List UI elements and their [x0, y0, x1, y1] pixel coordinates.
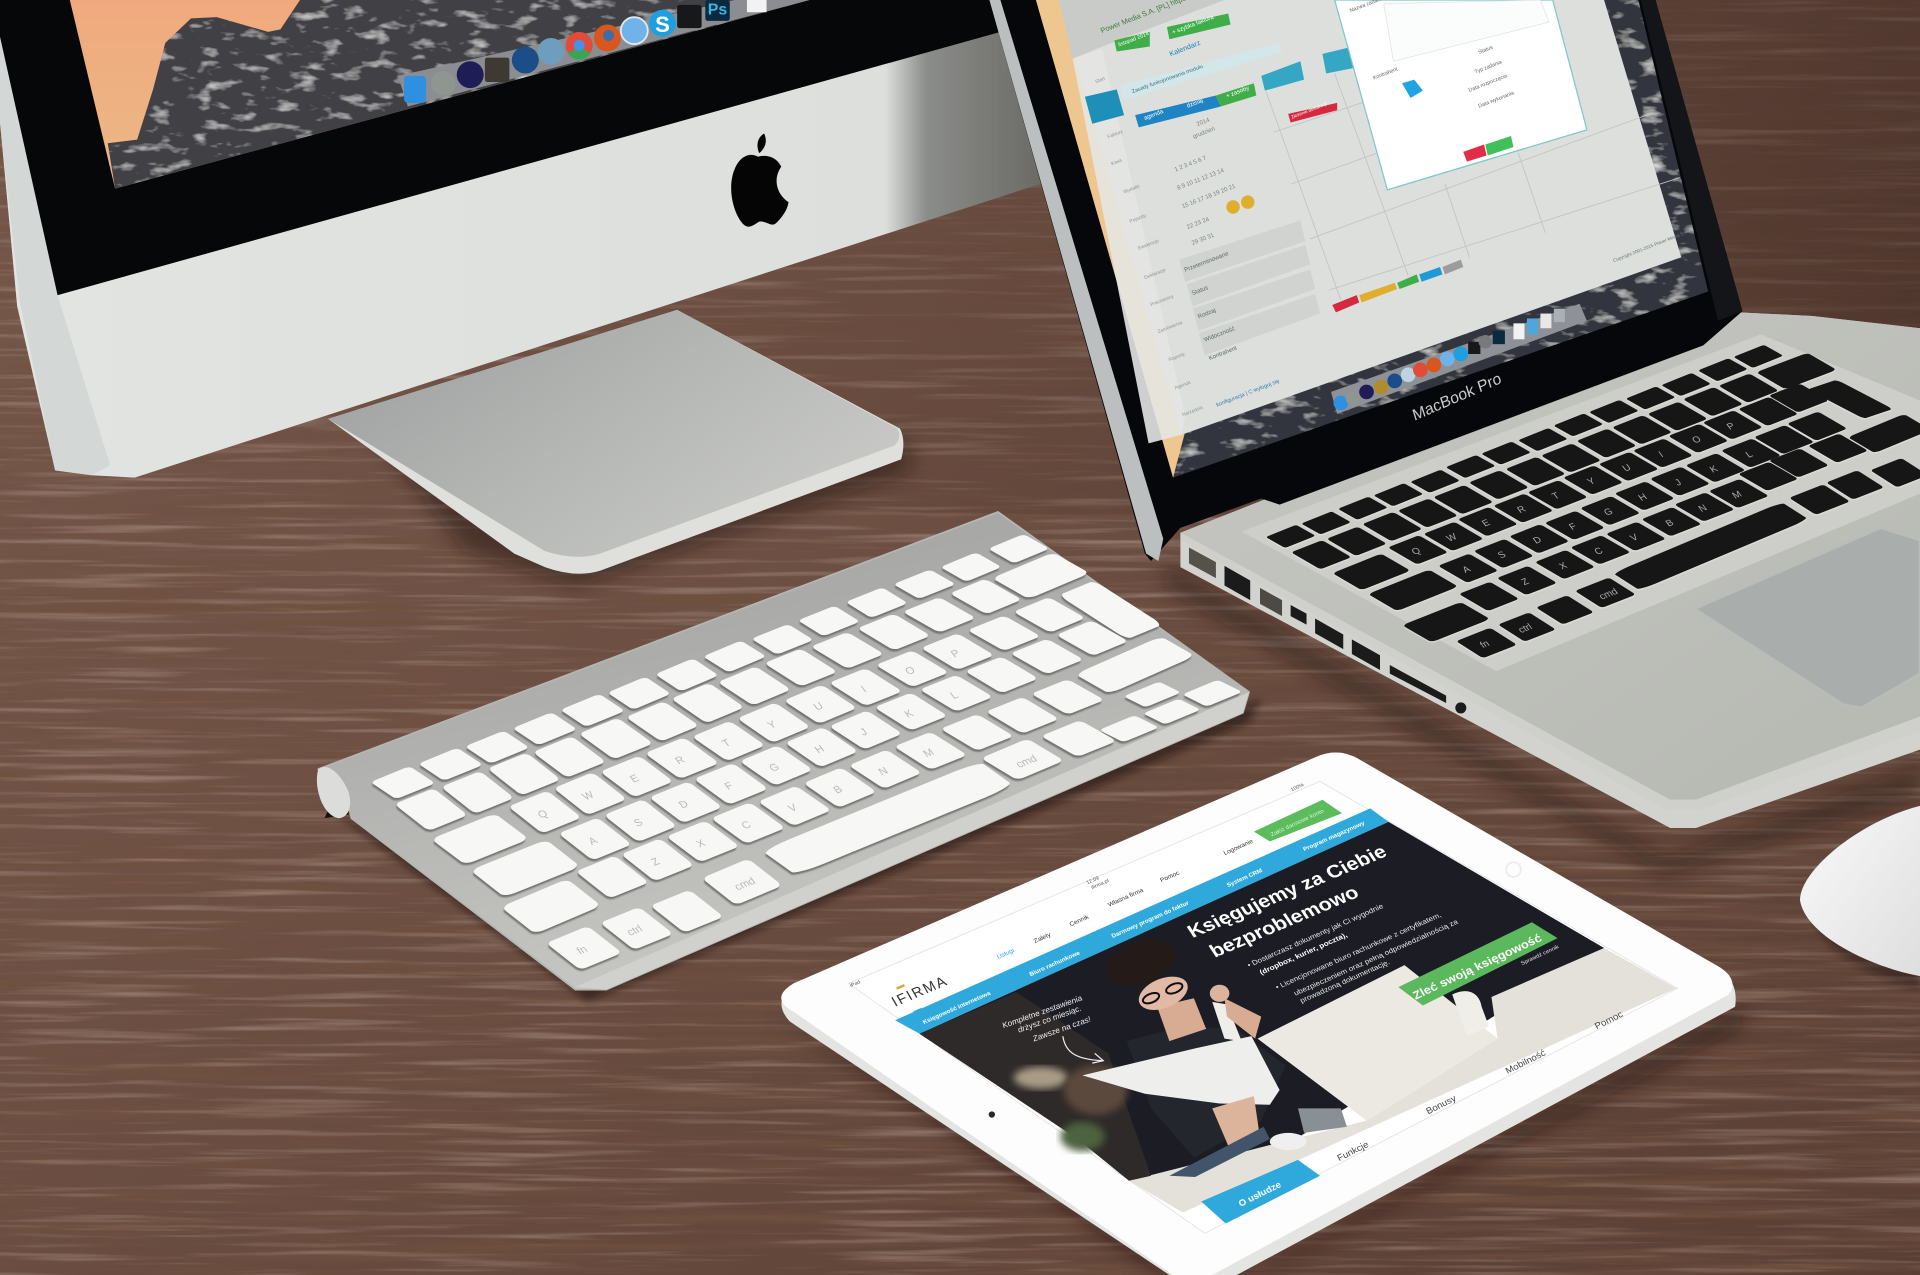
laptop trackpad [1695, 528, 1920, 708]
laptop ports [1189, 547, 1466, 713]
key letters: J [858, 727, 870, 738]
keyboard keys [370, 534, 1242, 970]
hero heading: Księgujemy za Ciebie [1184, 842, 1391, 942]
logo: iFIRMA: IFIRMA [889, 973, 951, 1010]
laptop lid bezel [989, 0, 1742, 561]
green call to action: Zleć swoją księgowość [1410, 931, 1544, 1002]
red event: Złożenie deklaracji [1290, 101, 1328, 120]
laptop key letters: E [1480, 518, 1493, 529]
key letters: O [903, 665, 918, 678]
notice strip: Zasady funkcjonowania modułu [1131, 64, 1204, 95]
key letters: G [767, 762, 782, 774]
blue nav items [922, 821, 1367, 1026]
dock icon: chrome [566, 32, 593, 60]
sidebar labels: Start [1094, 76, 1107, 85]
sidebar labels: Ewidencje [1137, 238, 1160, 252]
key letters: cmd [1014, 753, 1040, 770]
sidebar labels [1094, 76, 1204, 418]
sidebar labels: Zamówienia [1157, 320, 1184, 335]
key letters: B [831, 784, 845, 796]
laptop key letters: ctrl [1516, 622, 1535, 636]
dock icon: skype [649, 10, 676, 37]
laptop key letters: Q [1410, 546, 1424, 557]
status bar: ifirma.pl [1090, 878, 1110, 891]
calendar tab bar: dzisiaj [1186, 98, 1204, 110]
laptop key letters: D [1531, 535, 1544, 546]
iMac stand shadow and foot [328, 310, 912, 588]
laptop keys [1266, 345, 1920, 658]
laptop key letters: O [1690, 434, 1704, 446]
keyboard body [317, 512, 1249, 990]
laptop key letters: S [1496, 550, 1508, 561]
calculator and small mouse [1169, 1127, 1307, 1177]
label: MacBook Pro: MacBook Pro [1411, 370, 1504, 425]
handwritten note: Zawsze na czas! [1030, 1015, 1093, 1044]
sidebar labels: Kasa [1110, 158, 1123, 167]
laptop key letters: V [1628, 532, 1641, 544]
mini month calendar: grudzień [1192, 126, 1216, 140]
woman with paper [1082, 932, 1286, 1157]
tablet body [781, 753, 1736, 1275]
iMac black bezel [0, 0, 1000, 295]
key letters: R [673, 754, 688, 767]
key letters [536, 648, 1040, 957]
dock icon: eclipse [457, 61, 484, 88]
dock icon: finder [404, 76, 426, 103]
MacBook Pro [989, 0, 1920, 876]
red event [1288, 101, 1337, 122]
highlighted days [1226, 195, 1254, 214]
key letters: F [723, 780, 736, 792]
calendar tab bar: + zasoby [1225, 85, 1250, 100]
dock icon: launchpad [431, 71, 456, 96]
keyboard shadow [321, 698, 1261, 1002]
filter accordion: Status [1191, 285, 1209, 297]
tablet screen [849, 781, 1678, 1233]
iPad tablet [771, 753, 1745, 1275]
wireless keyboard [317, 512, 1261, 1002]
laptop key letters: R [1515, 504, 1528, 516]
laptop key letters: I [1657, 450, 1666, 460]
mini month calendar: 29 30 31 [1191, 233, 1216, 247]
laptop key letters: K [1708, 464, 1721, 475]
breadcrumb: Kalendarz: Kalendarz [1168, 38, 1202, 58]
main menu: Cennik [1068, 914, 1091, 928]
laptop key letters: P [1725, 421, 1737, 432]
status bar: 12:09 [1085, 875, 1101, 886]
task dialog: Data wykonania [1478, 90, 1515, 110]
handwritten note: drżysz co miesiąc. [1016, 1004, 1083, 1034]
dock icon: photoshop [705, 0, 730, 21]
hero bullet points: ubezpieczeniem oraz pełną odpowiedzialnością za [1292, 917, 1460, 997]
key letters: Y [765, 719, 779, 731]
key letters: S [632, 817, 646, 829]
blue nav items: Biuro rachunkowe [1029, 950, 1082, 978]
sidebar labels: Agenda [1174, 380, 1192, 391]
toolbar button: add: + szybka faktura [1171, 14, 1215, 36]
key letters: W [580, 789, 597, 803]
dock icon: safari [621, 17, 648, 44]
dock icon: firefox [594, 24, 621, 51]
key letters: T [720, 737, 734, 750]
laptop key letters: G [1602, 507, 1615, 518]
laptop shadow [1163, 563, 1920, 876]
hero desk [1129, 948, 1676, 1213]
sidebar labels: Pracownicy [1149, 293, 1175, 308]
laptop screen [1036, 0, 1708, 478]
key letters: I [859, 684, 869, 695]
dock icon: sublime [485, 58, 509, 82]
key letters: P [949, 648, 963, 660]
magic mouse [1800, 806, 1920, 990]
tablet front camera [989, 1111, 995, 1118]
mini month calendar: 8 9 10 11 12 13 14 [1176, 168, 1226, 192]
filter accordion: Przeterminowane [1184, 251, 1230, 274]
laptop key letters: fn [1478, 639, 1492, 651]
mini month calendar: 2014 [1196, 117, 1211, 128]
tablet shadow [771, 1004, 1745, 1275]
laptop key letters: X [1557, 560, 1570, 572]
mini month calendar [1174, 117, 1237, 247]
icon: apple logo [731, 134, 789, 227]
sidebar labels: Raporty [1168, 351, 1187, 363]
laptop key letters: cmd [1597, 587, 1620, 602]
dock icon: skype: S [655, 12, 670, 37]
calendar tab bar [1135, 83, 1256, 127]
hero heading: bezproblemowo [1206, 883, 1363, 962]
laptop key letters: L [1744, 449, 1756, 460]
top green button [1254, 800, 1342, 841]
hero dark panel [920, 822, 1604, 1209]
notice strip [1120, 43, 1282, 100]
mini month calendar: 1 2 3 4 5 6 7 [1174, 155, 1208, 173]
bottom tabs: O usłudze [1237, 1180, 1283, 1209]
task dialog: Typ zadania [1474, 59, 1503, 75]
screen wallpaper [1036, 0, 1708, 478]
laptop key letters: B [1664, 518, 1676, 529]
laptop key block [1266, 345, 1920, 658]
hero bullet points: • Licencjonowane biuro rachunkowe z certyfikatem, [1274, 911, 1443, 991]
main menu: Logowanie [1222, 838, 1255, 857]
key letters: ctrl [625, 923, 645, 938]
key letters: Z [649, 856, 663, 868]
key letters: E [628, 773, 642, 785]
sidebar labels: Wydatki [1122, 184, 1141, 195]
key letters: U [811, 700, 826, 713]
dock icon: terminal [677, 5, 702, 28]
laptop key letters: J [1673, 478, 1684, 488]
calendar tab bar: agenda [1143, 109, 1165, 122]
calendar grid lines [1266, 73, 1680, 300]
hero bullet points: • Dostarczasz dokumenty jak Ci wygodnie [1246, 902, 1385, 969]
key letters: M [921, 747, 937, 760]
pricing link: Sprawdź cennik [1520, 944, 1560, 967]
key letters: C [739, 819, 754, 832]
filter accordion: Rodzaj [1197, 308, 1217, 320]
laptop keyboard well [1242, 334, 1920, 671]
blue nav items: System CRM [1226, 868, 1264, 889]
bottom tabs: Mobilność [1504, 1048, 1548, 1076]
laptop key letters: N [1696, 503, 1710, 514]
sidebar labels: Pojazdy [1129, 213, 1148, 225]
white laptop and cup [1258, 965, 1498, 1133]
key letters: L [948, 690, 961, 702]
filter accordion: Kontrahent [1208, 346, 1238, 362]
sidebar labels: Narzędzia [1181, 405, 1204, 418]
dock icon: disk [512, 47, 539, 73]
main menu [996, 838, 1255, 961]
sidebar labels: Faktury [1107, 129, 1125, 140]
sidebar active item [1085, 89, 1124, 124]
handwritten note [1001, 994, 1093, 1044]
key letters: cmd [732, 876, 758, 893]
main menu: Własna firma [1107, 887, 1145, 908]
main menu: Zalety [1033, 931, 1053, 945]
iMac body and chin [0, 0, 1041, 478]
laptop key letters: M [1730, 489, 1744, 501]
blue nav items: Program magazynowy [1302, 821, 1367, 853]
tablet home button [1506, 862, 1521, 877]
bottom tabs: Bonusy [1424, 1093, 1458, 1116]
key letters: H [813, 743, 827, 756]
laptop key letters [1410, 421, 1756, 651]
key letters: X [694, 838, 708, 850]
key block [370, 534, 1242, 970]
bottom tabs: Funkcje [1335, 1139, 1370, 1163]
laptop key letters: Z [1519, 577, 1532, 588]
filter accordion: Widoczność [1203, 326, 1236, 344]
laptop key letters: A [1460, 564, 1473, 576]
task dialog: Kontrahent [1372, 66, 1399, 81]
key letters: V [786, 802, 801, 815]
status bar: 100% [1290, 782, 1306, 793]
key letters: A [586, 835, 601, 848]
blue nav items: Darmowy program do faktur [1111, 900, 1191, 940]
hero bullet points: prowadzoną dokumentację. [1298, 958, 1391, 1005]
arrow: note to woman [1063, 1036, 1103, 1063]
blurred office background [920, 992, 1151, 1181]
key letters: Q [536, 808, 551, 821]
view tabs [1261, 47, 1357, 91]
laptop key letters: Y [1585, 476, 1598, 487]
laptop key letters: W [1444, 532, 1460, 544]
dock icon: thunderbird [538, 38, 564, 65]
task dialog: Status [1478, 45, 1494, 56]
laptop key letters: F [1567, 521, 1579, 533]
laptop base [1180, 312, 1920, 828]
status bar [849, 782, 1306, 989]
handwritten note: Kompletne zestawienia [1001, 994, 1084, 1030]
laptop key letters: C [1592, 546, 1605, 557]
laptop key letters: U [1621, 463, 1634, 474]
hero bullet points: (dropbox, kurier, poczta), [1258, 931, 1349, 977]
task dialog [1335, 0, 1587, 190]
laptop key letters: H [1636, 492, 1650, 503]
toolbar button: add [1167, 13, 1231, 39]
toolbar button: grudzien: listopad 2014 [1118, 31, 1150, 48]
key letters: K [902, 708, 917, 720]
key letters: N [876, 765, 891, 778]
mini month calendar: 22 23 24 [1186, 217, 1211, 231]
sidebar labels: Deklaracje [1143, 267, 1167, 281]
iMac dock with app icons [398, 0, 809, 107]
laptop key letters: T [1550, 491, 1562, 502]
bottom tabs [1201, 1009, 1625, 1224]
hero bullet points [1246, 902, 1460, 1005]
key letters: fn [574, 944, 590, 957]
bottom tabs: Pomoc [1593, 1009, 1625, 1031]
main menu: Usługi [996, 947, 1016, 961]
copyright text: Copyright 2001-2015 Power Media S.A. [1612, 229, 1690, 263]
status bar: iPad [849, 979, 862, 989]
iMac screen wallpaper [70, 0, 809, 189]
dock icon: photoshop: Ps [708, 2, 727, 19]
web application window [1059, 0, 1690, 443]
iMac [0, 0, 1041, 588]
blue nav items: Księgowość internetowa [922, 991, 993, 1026]
configuration links: konfiguracja | C wyloguj się [1216, 378, 1281, 408]
calendar status legend [1332, 260, 1463, 312]
top green button: Załóż darmowe konto [1270, 809, 1325, 838]
mini month calendar: 15 16 17 18 19 20 21 [1181, 184, 1237, 210]
key letters: D [677, 798, 691, 811]
filter accordion [1179, 220, 1320, 362]
main menu: Pomoc [1159, 870, 1181, 884]
nav bar blue stripe [895, 808, 1389, 1034]
laptop dock [1331, 304, 1587, 414]
task dialog: Data rozpoczęcia [1468, 73, 1508, 94]
